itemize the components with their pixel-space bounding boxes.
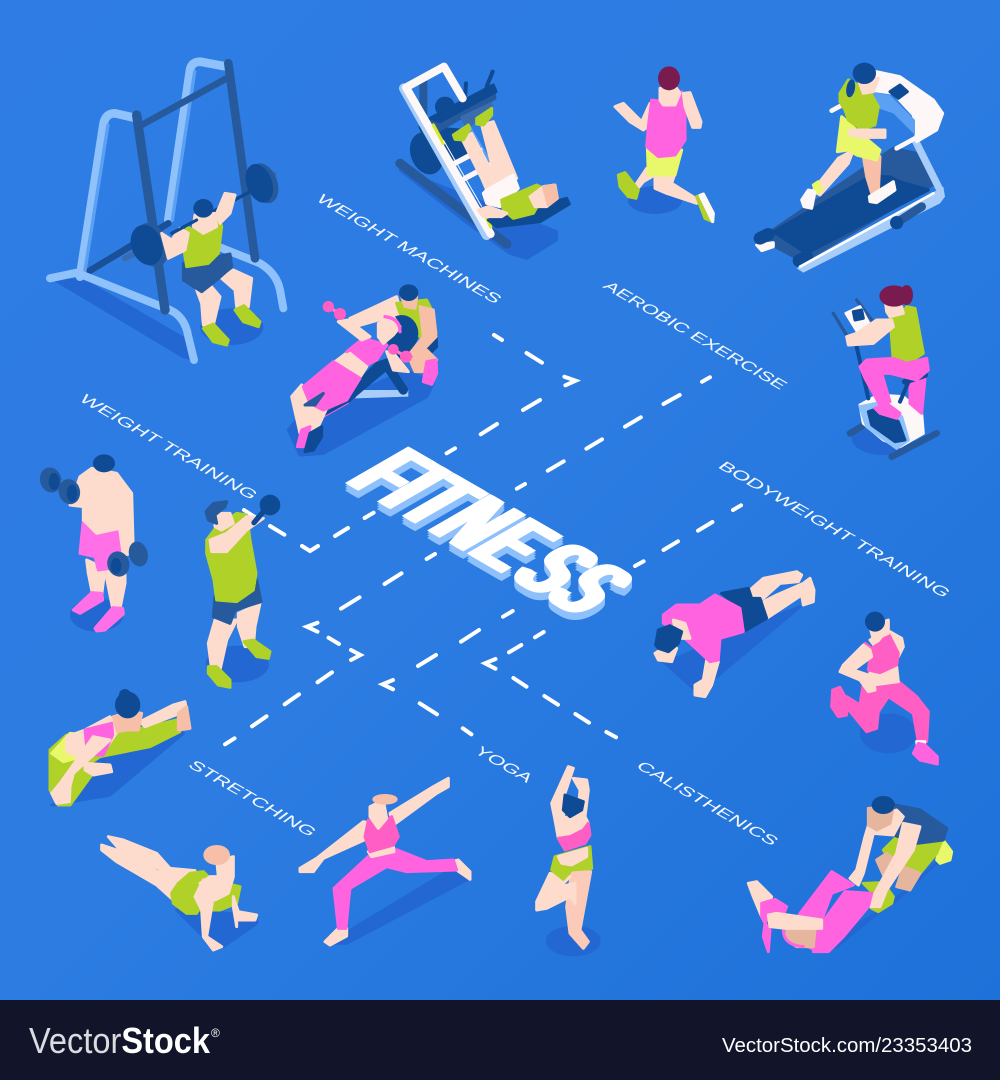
icon: smith machine frame (50, 62, 283, 360)
figure: prone cobra stretch (102, 837, 257, 950)
figure: squat with smith machine (50, 62, 284, 360)
label: aerobic exercise: AEROBIC EXERCISE (599, 279, 791, 392)
person: kneeling partner (850, 796, 952, 912)
icon: pink dumbbells (323, 301, 412, 363)
icon: raised dumbbell (37, 465, 83, 507)
title: FITNESS isometric lettering: FITNESS (321, 433, 655, 626)
person: woman on bench (292, 315, 418, 452)
label: calisthenics: CALISTHENICS (632, 759, 783, 848)
watermark logo: VectorStock (29, 1020, 211, 1061)
figure: man with kettlebell (206, 495, 280, 687)
icon: kettlebell (254, 495, 280, 523)
person: man on leg press (453, 108, 569, 227)
icon: workout bench (323, 343, 414, 417)
person: woman running on treadmill (802, 63, 895, 208)
icon: leg press frame (400, 67, 507, 244)
figure: man with dumbbells (37, 454, 151, 632)
icon: barbell (125, 159, 284, 272)
figure: treadmill (757, 63, 945, 273)
footer bar (0, 1000, 1000, 1080)
figure: lunge (832, 612, 937, 764)
figure: exercise bike (833, 285, 937, 457)
icon: stationary bike (833, 300, 937, 457)
figure: tree yoga pose (537, 767, 601, 956)
label: bodyweight training: BODYWEIGHT TRAINING (714, 459, 954, 600)
figure: seated forward bend (50, 689, 190, 805)
label: weight training: WEIGHT TRAINING (75, 392, 262, 502)
figure: dumbbell press on bench with trainer (288, 284, 437, 455)
figure: runner (615, 66, 713, 222)
figure: push-up (655, 572, 814, 697)
person: squatting man (162, 193, 260, 345)
watermark url: VectorStock.com/23353403 (722, 1035, 972, 1057)
dashed connectors (225, 335, 741, 744)
figure: warrior yoga pose (300, 778, 470, 945)
label: yoga: YOGA (470, 744, 537, 785)
icon: treadmill machine (757, 72, 945, 273)
person: woman cycling (847, 285, 928, 418)
icon: lowered dumbbell (104, 539, 151, 579)
person: trainer (350, 284, 437, 384)
person: woman doing sit-ups (748, 872, 872, 952)
figure: leg press machine (400, 67, 569, 258)
label: weight machines: WEIGHT MACHINES (312, 192, 506, 306)
registered mark: ® (211, 1026, 220, 1040)
label: stretching: STRETCHING (184, 758, 321, 839)
figure: partner sit-ups (748, 796, 952, 952)
